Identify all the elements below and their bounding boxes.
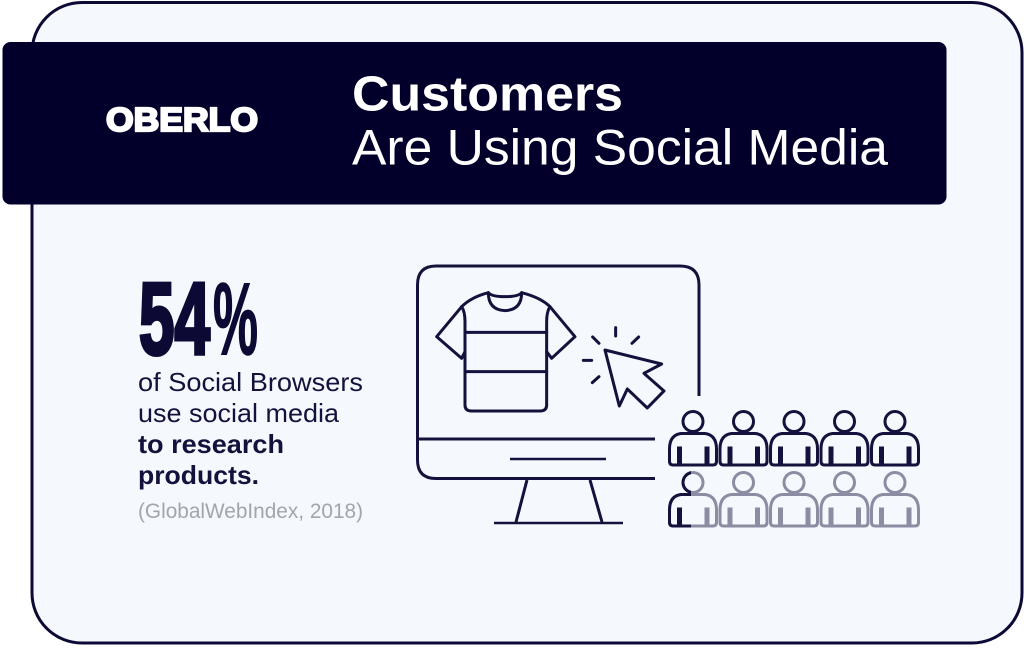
icon: mouse cursor with click rays: [583, 328, 664, 408]
statistic description: use social media: [138, 398, 340, 428]
statistic description: [138, 367, 363, 490]
icon: t-shirt: [437, 293, 575, 411]
logo: Oberlo: OBERLO: [106, 101, 258, 138]
source citation: (GlobalWebIndex, 2018): [138, 500, 363, 523]
icon: computer monitor: [418, 266, 699, 523]
icon: people, bottom row (54% highlighted): [670, 472, 918, 526]
title: [352, 68, 888, 176]
title: Customers: [352, 68, 623, 122]
text: %: [213, 262, 258, 376]
header banner: [2, 42, 946, 204]
statistic description: of Social Browsers: [138, 367, 363, 397]
title: Are Using Social Media: [352, 120, 888, 176]
icon: people, top row: [670, 412, 918, 465]
statistic: 54%: 54: [139, 262, 210, 376]
statistic description: products.: [138, 460, 259, 490]
statistic description: to research: [138, 429, 284, 459]
